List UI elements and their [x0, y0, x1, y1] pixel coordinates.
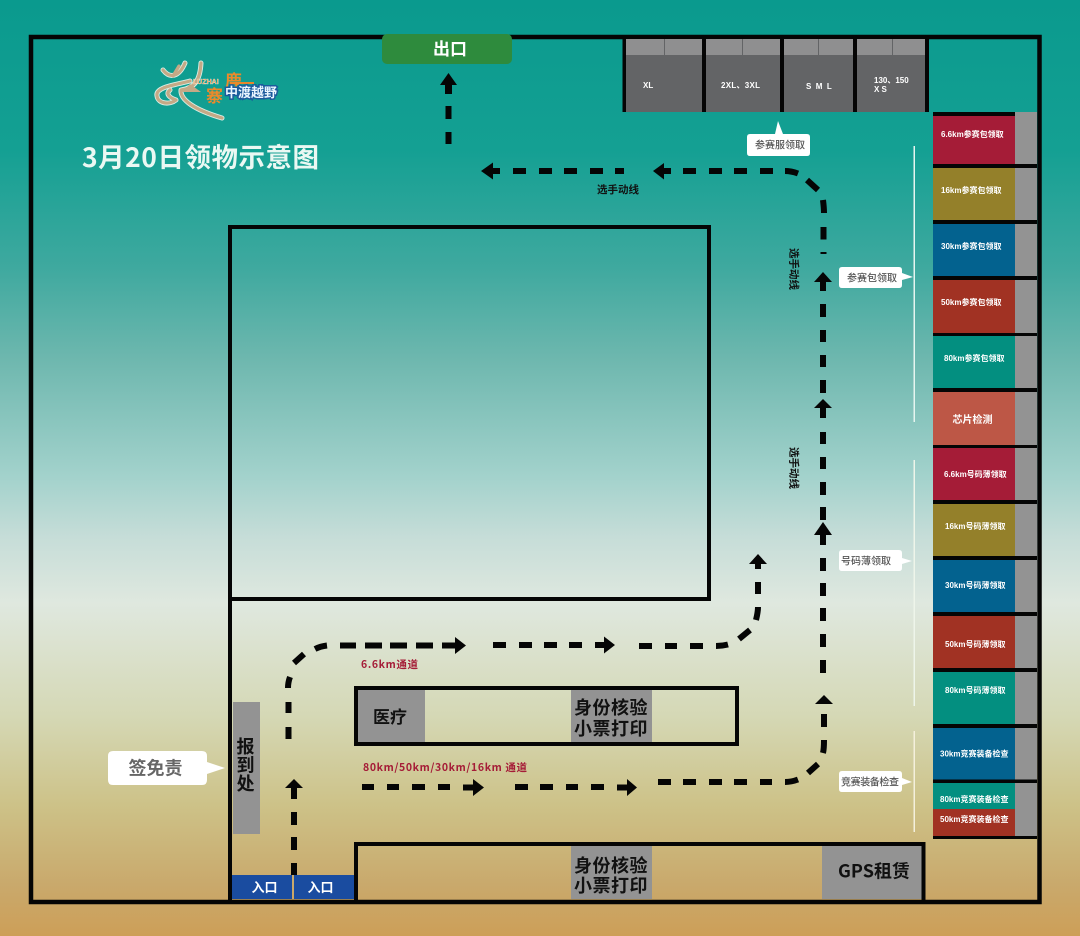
clothing 2XL 3XL: 2XL、3XL [721, 81, 760, 90]
callout: waiver [108, 751, 225, 785]
callout: waiver: 签免责 [128, 754, 182, 780]
arrow: main route bottom stretch [814, 522, 832, 673]
bracket line: pack pickup [914, 146, 915, 422]
check-in desk: 到 [236, 752, 254, 778]
clothing 130 150 XS [857, 39, 925, 112]
booth: 30km pack [933, 224, 1037, 276]
left inner wall [228, 599, 232, 901]
booth: 6.6km bib: 6.6km号码薄领取 [944, 469, 1007, 479]
entrance right [294, 875, 354, 899]
arrow: from entrance [285, 779, 303, 875]
GPS rental: GPS租赁 [838, 858, 910, 884]
booth: 50km gear check [933, 809, 1015, 836]
entrance right: 入口 [307, 877, 334, 896]
race clothing pickup row [622, 39, 929, 112]
booth: 6.6km pack: 6.6km参赛包领取 [941, 129, 1004, 139]
booth: 16km pack: 16km参赛包领取 [941, 185, 1001, 195]
arrow: 6.6km route second part [493, 636, 615, 654]
check-in desk: 报 [236, 733, 254, 759]
check-in desk [233, 702, 260, 834]
booth: 30km pack: 30km参赛包领取 [941, 241, 1001, 251]
booth: 16km pack [933, 168, 1037, 220]
booth: 80km gear check: 80km竞赛装备检查 [940, 794, 1008, 804]
medical: 医疗 [373, 703, 407, 728]
clothing 2XL 3XL [706, 39, 780, 112]
entrance left [232, 875, 292, 899]
callout: bib pickup [839, 550, 912, 571]
arrow: long route first part [362, 779, 484, 796]
logo: 鹿 [225, 67, 242, 92]
booth: 80km pack [933, 336, 1037, 388]
ID check and ticket print: 小票打印 [574, 715, 648, 741]
logo: 寨 [206, 82, 223, 107]
booth: 16km bib [933, 504, 1037, 556]
check-in desk: 处 [236, 770, 254, 796]
right pickup column [933, 112, 1037, 839]
label: runner route vertical lower: 选手动线 [786, 447, 802, 489]
logo [157, 63, 277, 118]
arrow: 6.6km route first part [288, 637, 466, 739]
ID check and ticket print [571, 690, 652, 742]
ID check and ticket print lower [571, 846, 652, 899]
booth: 30km bib [933, 560, 1037, 612]
clothing S M L [784, 39, 853, 112]
booth: chip check [933, 392, 1037, 445]
title: 3月20日领物示意图 [82, 136, 319, 175]
entrance left: 入口 [251, 877, 278, 896]
booth: chip check: 芯片检测 [952, 411, 992, 426]
medical and ID check booth [356, 688, 737, 744]
booth: 6.6km bib [933, 448, 1037, 500]
booth: 80km gear check [933, 783, 1037, 836]
booth: 30km bib: 30km号码薄领取 [945, 580, 1005, 590]
callout: gear check: 竞赛装备检查 [841, 774, 899, 788]
booth: 30km gear check: 30km竞赛装备检查 [940, 748, 1008, 758]
callout: clothing pickup: 参赛服领取 [755, 136, 805, 152]
GPS rental [822, 846, 922, 899]
arrow: long route second part [515, 779, 637, 796]
arrow: main route middle stretch [814, 399, 832, 520]
booth: 6.6km pack [933, 112, 1037, 164]
arrow: 6.6km route third part [639, 554, 767, 646]
callout: gear check [839, 771, 912, 792]
label: long distance lane: 80km/50km/30km/16km 通道 [363, 760, 528, 775]
clothing XL [626, 39, 702, 112]
booth: 80km bib [933, 672, 1037, 724]
callout: bib pickup: 号码薄领取 [841, 552, 891, 568]
booth: 80km pack: 80km参赛包领取 [944, 353, 1004, 363]
clothing 130 150 XS: X S [874, 85, 888, 94]
logo: LUZHAI [193, 79, 219, 86]
medical [358, 690, 425, 742]
label: 6.6km lane: 6.6km通道 [361, 657, 418, 672]
booth: 80km bib: 80km号码薄领取 [945, 685, 1005, 695]
booth: 50km pack: 50km参赛包领取 [941, 297, 1001, 307]
arrow: top corner stretch [653, 163, 824, 254]
callout: pack pickup: 参赛包领取 [847, 270, 897, 284]
clothing S M L: S M L [806, 82, 832, 91]
label: runner route horizontal: 选手动线 [597, 182, 639, 197]
central building block [230, 227, 709, 599]
booth: 16km bib: 16km号码薄领取 [945, 521, 1005, 531]
arrow: top left stretch [481, 162, 624, 180]
ID check and ticket print lower: 小票打印 [574, 872, 648, 898]
ID check and ticket print lower: 身份核验 [574, 852, 648, 878]
lower ID check and GPS booth [356, 844, 924, 900]
booth: 50km bib [933, 616, 1037, 668]
booth: 50km gear check: 50km竞赛装备检查 [940, 814, 1008, 824]
clothing 130 150 XS: 130、150 [874, 76, 909, 85]
bracket line: bib pickup [914, 460, 915, 706]
booth: 50km pack [933, 280, 1037, 333]
callout: clothing pickup [747, 121, 810, 156]
booth: 30km gear check [933, 728, 1037, 780]
bracket line: gear check [914, 731, 915, 832]
label: runner route vertical upper: 选手动线 [786, 248, 802, 290]
booth: 50km bib: 50km号码薄领取 [945, 639, 1005, 649]
exit sign [382, 34, 512, 64]
logo: 中渡越野 [225, 82, 277, 101]
arrow: main route upper stretch [814, 272, 832, 393]
ID check and ticket print: 身份核验 [574, 694, 648, 720]
clothing XL: XL [643, 81, 653, 90]
exit sign: 出口 [433, 35, 467, 60]
arrow: long route third part [658, 695, 833, 782]
arrow: to exit [440, 73, 457, 144]
callout: pack pickup [839, 267, 913, 288]
